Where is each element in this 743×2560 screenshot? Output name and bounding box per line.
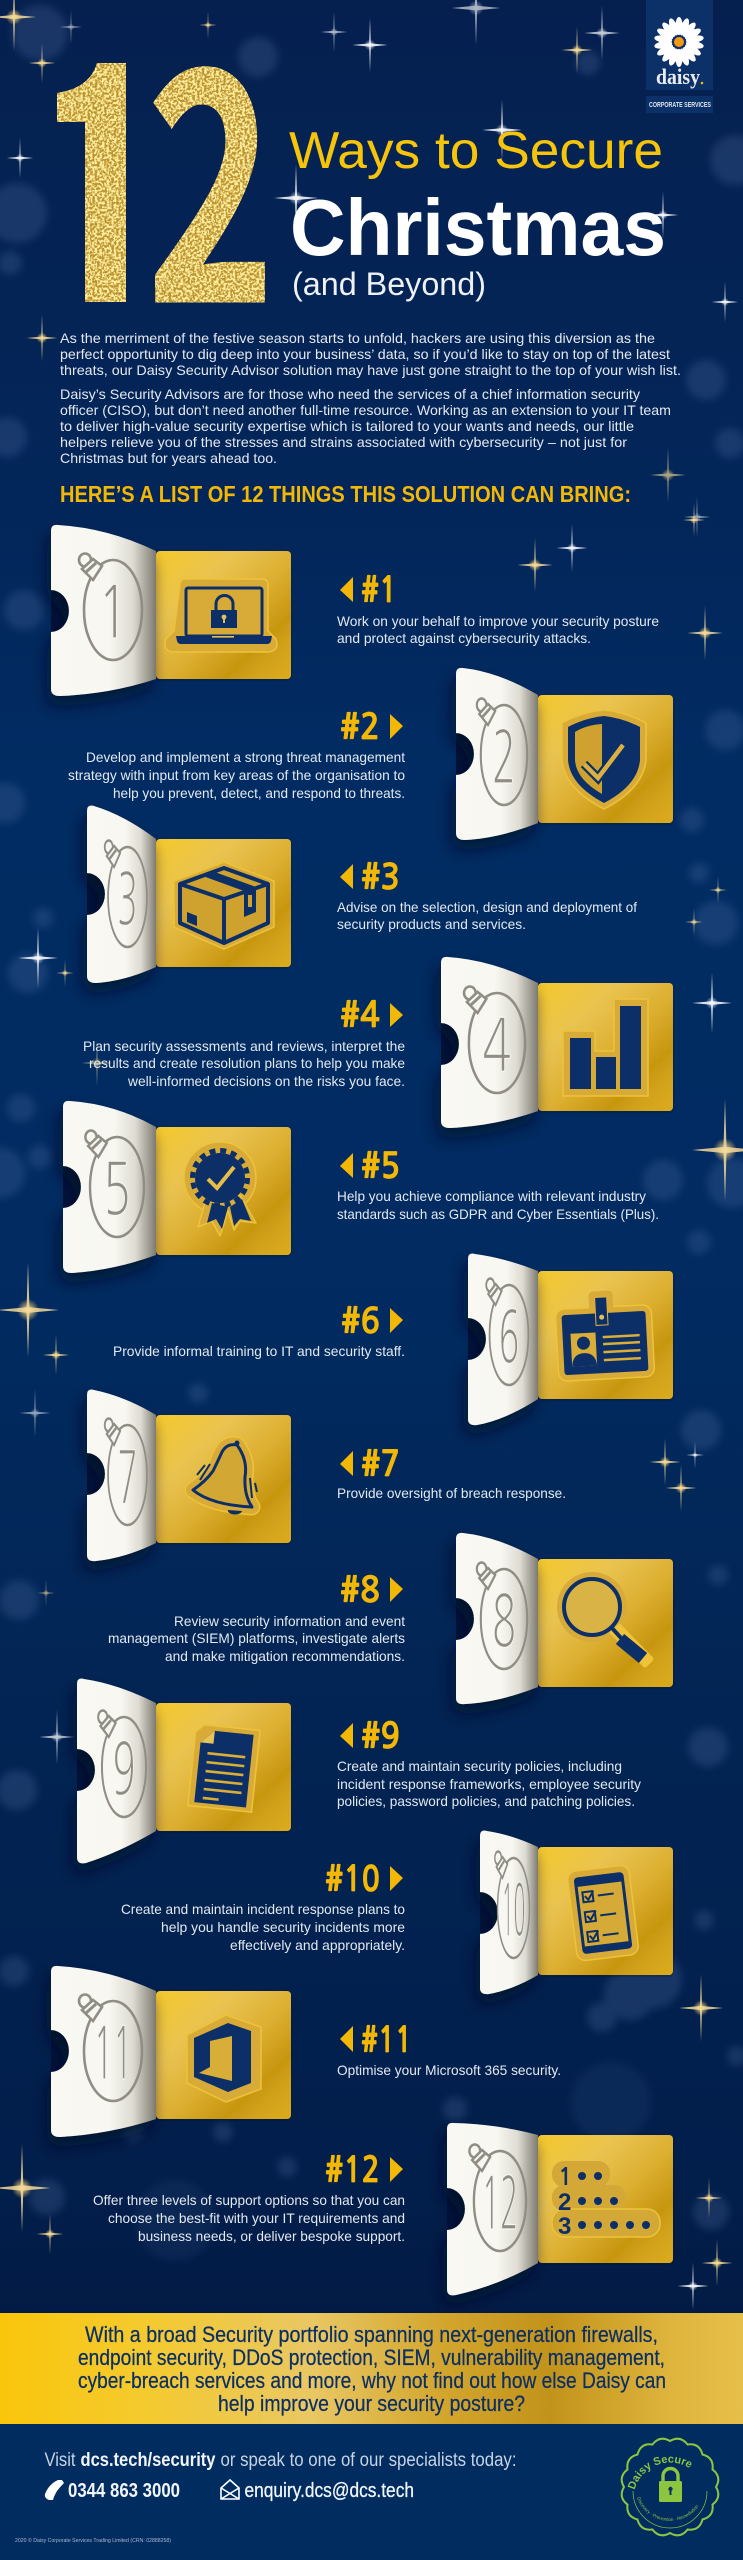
step 9 text bbox=[337, 1720, 641, 1809]
badge: Daisy Secure bbox=[620, 2438, 720, 2536]
step 9 text: Create and maintain security policies, including bbox=[337, 1758, 622, 1774]
step 4 text: results and create resolution plans to help you make bbox=[89, 1055, 405, 1071]
copyright: 2020 © Daisy Corporate Services Trading Limited (CRN: 02888258) bbox=[15, 2537, 171, 2544]
ornament 11 bbox=[79, 1994, 142, 2101]
icon: shield with tick bbox=[562, 710, 646, 809]
step 1 text bbox=[337, 574, 659, 646]
card 2 bbox=[456, 668, 673, 840]
ornament 1: 1 bbox=[98, 577, 128, 648]
step 2 text bbox=[68, 711, 405, 801]
step 1 text: and protect against cybersecurity attacks. bbox=[337, 630, 591, 646]
ornament 12: 12 bbox=[482, 2168, 518, 2239]
contact prompt: Visit bbox=[44, 2450, 76, 2471]
ornament 4: 4 bbox=[482, 1009, 512, 1082]
intro text: As the merriment of the festive season starts to unfold, hackers are using this diversion as the bbox=[60, 330, 655, 346]
step 6 text: Provide informal training to IT and security staff. bbox=[113, 1343, 405, 1359]
arrow bbox=[340, 1451, 353, 1476]
arrow bbox=[390, 1577, 403, 1602]
panel: footer contact bbox=[0, 2424, 743, 2560]
ornament 8: 8 bbox=[492, 1586, 516, 1658]
ornament 3 bbox=[105, 840, 147, 947]
card 5 bbox=[63, 1101, 291, 1273]
ornament 6 bbox=[486, 1278, 528, 1385]
step 9 text: incident response frameworks, employee security bbox=[337, 1776, 641, 1792]
step 1 text: #1 bbox=[361, 574, 397, 608]
ornament 7: 7 bbox=[117, 1443, 138, 1515]
step 3 text bbox=[337, 861, 637, 932]
step 12 text: business needs, or deliver bespoke support. bbox=[138, 2228, 405, 2244]
badge: Daisy Secure: Discovery · Prevention · Remediation bbox=[637, 2497, 698, 2521]
step 12 text: choose the best-fit with your IT requirements and bbox=[108, 2210, 405, 2226]
step 7 text: Provide oversight of breach response. bbox=[337, 1485, 566, 1501]
step 8 text: management (SIEM) platforms, investigate alerts bbox=[108, 1630, 405, 1646]
card 9 bbox=[77, 1679, 291, 1863]
ornament 3: 3 bbox=[117, 865, 138, 937]
step 6 text bbox=[113, 1305, 405, 1359]
intro text: officer (CISO), but don’t need another full-time resource. Working as an extension to your IT team bbox=[60, 402, 671, 418]
step 3 text: Advise on the selection, design and deployment of bbox=[337, 899, 637, 915]
arrow bbox=[390, 2157, 403, 2182]
step 9 text: policies, password policies, and patching policies. bbox=[337, 1793, 635, 1809]
step 10 text: #10 bbox=[325, 1863, 380, 1897]
logo: daisy corporate services: daisy bbox=[656, 64, 700, 89]
step 5 text: Help you achieve compliance with relevant industry bbox=[337, 1188, 646, 1204]
step 11 text: Optimise your Microsoft 365 security. bbox=[337, 2062, 561, 2078]
email address: enquiry.dcs@dcs.tech bbox=[244, 2480, 414, 2502]
ornament 2: 2 bbox=[492, 722, 516, 794]
icon: envelope bbox=[221, 2480, 239, 2499]
arrow bbox=[390, 1866, 403, 1891]
card 7 bbox=[87, 1390, 291, 1561]
step 8 text: #8 bbox=[340, 1574, 380, 1608]
step 3 text: #3 bbox=[361, 861, 400, 895]
card 4 bbox=[441, 957, 673, 1128]
card 6 bbox=[468, 1254, 673, 1425]
icon: ringing bell bbox=[193, 1440, 257, 1515]
step 12 text: Offer three levels of support options so that you can bbox=[93, 2192, 405, 2208]
card 10 bbox=[480, 1831, 673, 1994]
card 3 bbox=[87, 806, 291, 983]
ornament 9 bbox=[98, 1710, 146, 1817]
panel: gold call-to-action band: cyber-breach services and more, why not find out how else Daisy can bbox=[78, 2368, 666, 2393]
icon: office logo bbox=[187, 2015, 261, 2102]
step 12 text bbox=[93, 2154, 405, 2244]
ornament 12 bbox=[469, 2144, 526, 2251]
icon: three support levels: 3 bbox=[558, 2213, 571, 2240]
step 11 text: #11 bbox=[361, 2024, 412, 2058]
step 9 text: #9 bbox=[361, 1720, 400, 1754]
step 11 text bbox=[337, 2024, 561, 2078]
ornament 4 bbox=[464, 986, 525, 1093]
step 8 text: Review security information and event bbox=[174, 1613, 405, 1629]
icon: parcel box bbox=[174, 862, 274, 949]
step 10 text: Create and maintain incident response plans to bbox=[121, 1901, 405, 1917]
step 2 text: #2 bbox=[340, 711, 380, 745]
panel: gold call-to-action band: endpoint security, DDoS protection, SIEM, vulnerability management, bbox=[78, 2345, 665, 2370]
arrow bbox=[340, 577, 353, 602]
icon: magnifying glass bbox=[557, 1572, 651, 1665]
step 7 text bbox=[337, 1448, 566, 1501]
icon: three support levels: 2 bbox=[558, 2189, 571, 2216]
icon: three support levels: 1 bbox=[558, 2165, 573, 2189]
title: Ways to Secure Christmas: Christmas bbox=[290, 183, 666, 272]
icon: laptop with padlock bbox=[165, 579, 277, 652]
arrow bbox=[340, 2026, 353, 2052]
step 10 text: help you handle security incidents more bbox=[161, 1919, 405, 1935]
intro text: to deliver high-value security expertise which is tailored to your wants and needs, our little bbox=[60, 418, 634, 434]
contact prompt: or speak to one of our specialists today: bbox=[220, 2450, 516, 2471]
heading: list of 12 things: HERE’S A LIST OF 12 THINGS THIS SOLUTION CAN BRING: bbox=[60, 481, 631, 507]
contact prompt: dcs.tech/security bbox=[80, 2450, 216, 2471]
step 8 text: and make mitigation recommendations. bbox=[165, 1648, 405, 1664]
ornament 11: 11 bbox=[94, 2018, 132, 2091]
logo: daisy corporate services bbox=[646, 0, 713, 113]
icon: document bbox=[188, 1724, 260, 1812]
ornament 8 bbox=[477, 1562, 527, 1669]
card 11 bbox=[51, 1966, 291, 2137]
arrow bbox=[390, 714, 403, 739]
step 4 text bbox=[83, 999, 405, 1089]
card 1 bbox=[51, 525, 291, 696]
ornament 5 bbox=[85, 1130, 144, 1237]
step 10 text: effectively and appropriately. bbox=[230, 1937, 405, 1953]
step 3 text: security products and services. bbox=[337, 916, 526, 932]
intro text: helpers relieve you of the stresses and strains associated with cybersecurity – not just for bbox=[60, 434, 627, 450]
step 2 text: strategy with input from key areas of the organisation to bbox=[68, 767, 405, 783]
arrow bbox=[340, 1723, 353, 1748]
panel: gold call-to-action band: With a broad Security portfolio spanning next-generation firewalls, bbox=[85, 2322, 658, 2347]
intro text: perfect opportunity to dig deep into your business’ data, so if you’d like to stay on top of the latest bbox=[60, 346, 670, 362]
ornament 10 bbox=[495, 1852, 529, 1958]
step 12 text: #12 bbox=[325, 2154, 380, 2188]
panel: gold call-to-action band: help improve your security posture? bbox=[218, 2391, 525, 2416]
icon: telephone bbox=[45, 2480, 64, 2500]
ornament 6: 6 bbox=[499, 1303, 519, 1375]
intro text: Christmas but for years ahead too. bbox=[60, 450, 277, 466]
intro text: threats, our Daisy Security Advisor solution may have just gone straight to the top of your wish list. bbox=[60, 362, 681, 378]
step 7 text: #7 bbox=[361, 1448, 400, 1482]
title: Ways to Secure Christmas: (and Beyond) bbox=[292, 266, 486, 302]
title numeral: glitter 12 bbox=[57, 63, 265, 302]
ornament 7 bbox=[105, 1418, 147, 1525]
badge: Daisy Secure: Daisy Secure bbox=[628, 2456, 692, 2490]
step 4 text: #4 bbox=[340, 999, 380, 1033]
title: Ways to Secure Christmas bbox=[289, 122, 666, 302]
intro text bbox=[60, 330, 681, 466]
ornament 9: 9 bbox=[112, 1735, 136, 1806]
ornament 1 bbox=[79, 554, 142, 660]
step 5 text: standards such as GDPR and Cyber Essentials (Plus). bbox=[337, 1206, 659, 1222]
step 2 text: help you prevent, detect, and respond to threats. bbox=[113, 785, 405, 801]
icon: three support levels bbox=[552, 2161, 660, 2240]
ornament 10: 10 bbox=[502, 1875, 525, 1947]
icon: rosette badge bbox=[184, 1142, 256, 1236]
panel: gold call-to-action band bbox=[0, 2313, 743, 2424]
ornament 2 bbox=[477, 698, 527, 805]
icon: daisy flower bbox=[654, 17, 704, 67]
logo: daisy corporate services: CORPORATE SERVICES bbox=[649, 102, 711, 109]
ornament 5: 5 bbox=[103, 1153, 131, 1226]
step 2 text: Develop and implement a strong threat management bbox=[86, 749, 405, 765]
step 5 text: #5 bbox=[361, 1150, 400, 1184]
intro text: Daisy’s Security Advisors are for those who need the services of a chief information security bbox=[60, 386, 640, 402]
step 1 text: Work on your behalf to improve your security posture bbox=[337, 613, 659, 629]
step 10 text bbox=[121, 1863, 405, 1953]
card 8 bbox=[456, 1533, 673, 1704]
contact prompt bbox=[44, 2450, 516, 2471]
step 8 text bbox=[108, 1574, 405, 1664]
arrow bbox=[340, 864, 353, 889]
icon: ID badge bbox=[554, 1289, 655, 1381]
step 4 text: well-informed decisions on the risks you face. bbox=[127, 1073, 405, 1089]
icon: bar chart bbox=[563, 999, 648, 1096]
step 5 text bbox=[337, 1150, 659, 1222]
arrow bbox=[340, 1153, 353, 1178]
step 6 text: #6 bbox=[341, 1305, 380, 1339]
card 12 bbox=[447, 2123, 673, 2295]
arrow bbox=[390, 1003, 403, 1027]
title: Ways to Secure Christmas: Ways to Secure bbox=[289, 122, 663, 180]
arrow bbox=[390, 1308, 403, 1333]
title numeral: glitter 12: 1 bbox=[6, 0, 195, 374]
phone number: 0344 863 3000 bbox=[68, 2480, 180, 2502]
icon: tablet checklist bbox=[567, 1865, 639, 1961]
step 4 text: Plan security assessments and reviews, interpret the bbox=[83, 1038, 405, 1054]
